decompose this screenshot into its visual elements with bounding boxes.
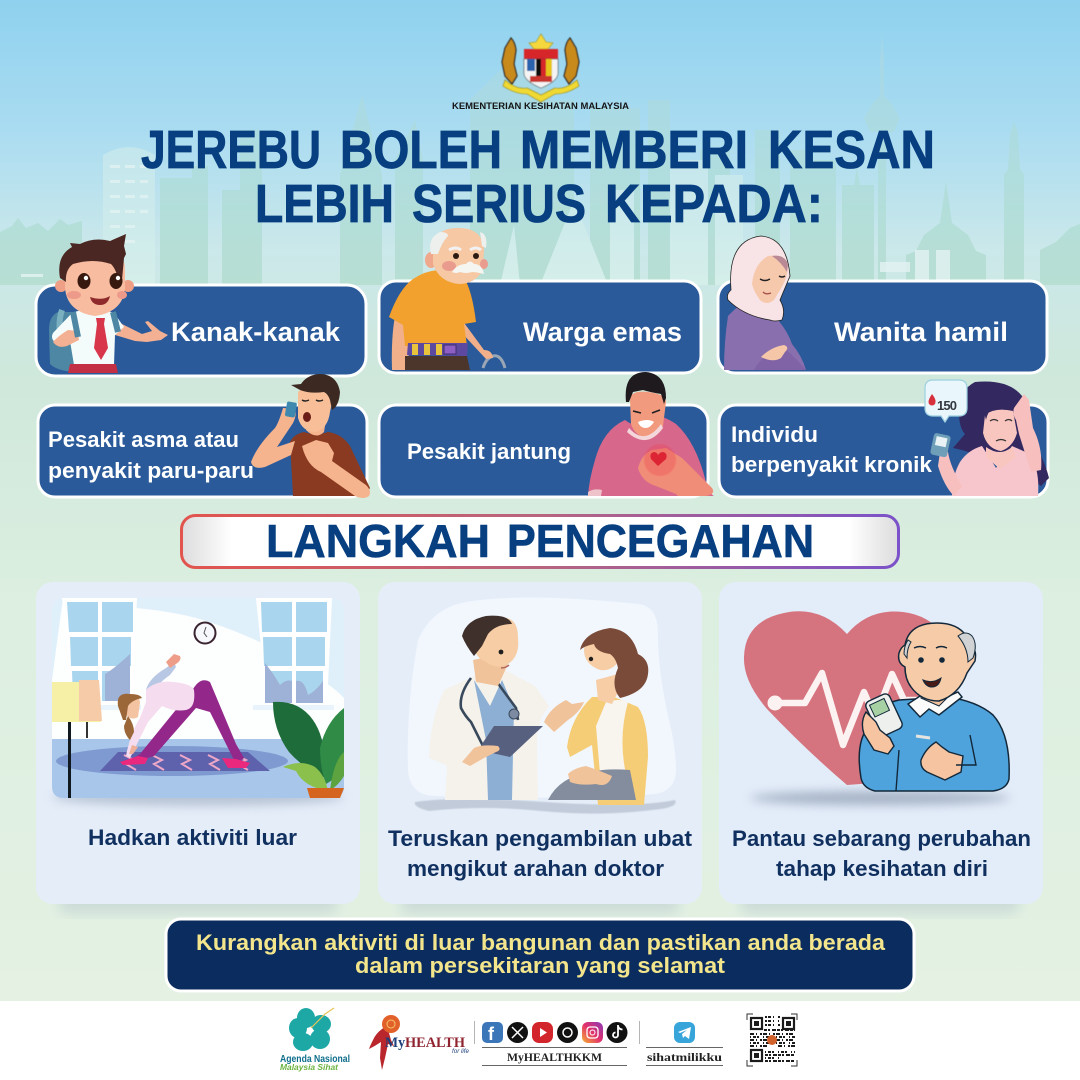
banner: Langkah Pencegahan (182, 515, 898, 568)
title: JEREBU (141, 120, 321, 180)
panel: limit outdoor activity (36, 582, 360, 904)
rug (56, 746, 288, 776)
label: Individu berpenyakit kronik (731, 422, 933, 477)
ministry name: KEMENTERIAN KESIHATAN MALAYSIA (452, 101, 630, 111)
social media icons: f (488, 1024, 495, 1044)
banner heading: LANGKAH (266, 515, 490, 567)
caption: Hadkan aktiviti luar (88, 825, 297, 850)
social media icons (482, 1022, 628, 1044)
title (141, 120, 935, 234)
banner heading (266, 515, 814, 567)
icon: woman checking glucose (930, 381, 1049, 496)
skyline silhouette (0, 35, 1080, 285)
handle: sihatmilikku: sihatmilikku (647, 1052, 723, 1064)
woman stretching (118, 654, 250, 768)
icon: man with heart pain (588, 372, 714, 496)
footer band (0, 1001, 1080, 1080)
patient (548, 628, 648, 805)
card: Kanak-kanak (36, 285, 366, 376)
icon: schoolboy (49, 234, 168, 373)
icon: elderly man with cane (389, 228, 505, 370)
panel: continue medication (378, 582, 702, 904)
label: Individu berpenyakit kronik: berpenyakit kronik (731, 452, 933, 477)
elderly man with meter (859, 623, 1009, 791)
card: Pesakit asma (38, 405, 367, 497)
icon: blood sugar speech bubble (925, 380, 967, 422)
right window (253, 598, 334, 710)
icon: telegram (674, 1022, 695, 1043)
left window (62, 598, 141, 710)
handle: sihatmilikku (646, 1048, 723, 1066)
floor lamp (52, 680, 102, 798)
label: Pesakit asma atau penyakit paru-paru (48, 427, 254, 483)
card: Warga emas (379, 281, 701, 373)
title: LEBIH (255, 174, 394, 234)
title: MEMBERI (520, 120, 748, 180)
logo: Agenda Nasional Malaysia Sihat: Agenda Nasional (280, 1054, 350, 1065)
label: Pesakit asma atau penyakit paru-paru: penyakit paru-paru (48, 458, 254, 483)
label: Warga emas: Warga emas (523, 317, 682, 347)
panel shadows (60, 885, 1018, 913)
label: Individu berpenyakit kronik: Individu (731, 422, 818, 447)
potted plant (273, 702, 344, 798)
title: SERIUS (412, 174, 586, 234)
card: Pesakit jantung (379, 405, 708, 497)
QR code (747, 1014, 797, 1066)
logo: national crest (502, 34, 579, 102)
logo: MyHEALTH for life: HEALTH (405, 1035, 466, 1051)
logo: Agenda Nasional Malaysia Sihat (280, 1008, 350, 1072)
title: BOLEH (340, 120, 502, 180)
heart with pulse (744, 611, 953, 785)
illustration: doctor and patient (408, 597, 676, 814)
card: Individu berpenyakit kronik (719, 405, 1048, 497)
logo: MyHEALTH for life: for life (452, 1049, 470, 1055)
handle: MyHEALTHKKM: MyHEALTHKKM (507, 1052, 602, 1064)
icon: pregnant woman in hijab (724, 236, 806, 370)
illustration: stretching indoors (52, 598, 344, 806)
title: KESAN (768, 120, 935, 180)
illustration: heart and elderly man (744, 611, 1010, 805)
icon: man with asthma inhaler (251, 374, 370, 498)
label: Wanita hamil: Wanita hamil (834, 317, 1008, 347)
doctor (429, 616, 584, 800)
caption: mengikut arahan doktor (407, 856, 664, 881)
label: Kanak-kanak: Kanak-kanak (171, 317, 341, 347)
icon: blood sugar speech bubble: 150 (937, 398, 957, 413)
wall clock (194, 622, 216, 644)
callout: advice: dalam persekitaran yang selamat (355, 953, 726, 978)
caption: tahap kesihatan diri (776, 856, 988, 881)
label: Pesakit jantung: Pesakit jantung (407, 439, 571, 464)
caption: Pantau sebarang perubahan (732, 826, 1031, 851)
logo: MyHEALTH for life (369, 1015, 470, 1070)
banner heading: PENCEGAHAN (507, 515, 814, 567)
callout: advice (166, 919, 914, 991)
caption: Teruskan pengambilan ubat (388, 826, 693, 851)
title: KEPADA: (605, 174, 823, 234)
handle: MyHEALTHKKM (482, 1048, 627, 1066)
callout: advice: Kurangkan aktiviti di luar bangunan dan pastikan anda berada (196, 930, 886, 955)
caption (732, 826, 1031, 881)
logo: Agenda Nasional Malaysia Sihat: Malaysia Sihat (280, 1062, 339, 1072)
label: Pesakit asma atau penyakit paru-paru: Pesakit asma atau (48, 427, 239, 452)
caption (388, 826, 693, 881)
logo: MyHEALTH for life: My (385, 1035, 406, 1051)
panel: monitor health (719, 582, 1043, 904)
card: Wanita hamil (718, 281, 1047, 373)
